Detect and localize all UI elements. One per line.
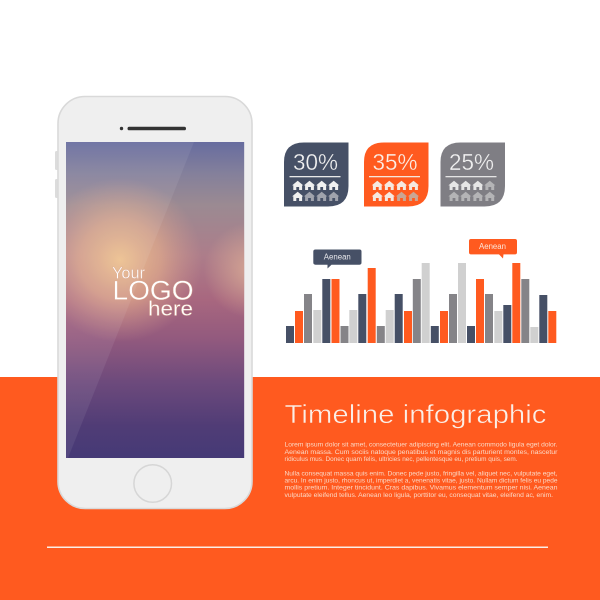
house icons xyxy=(448,181,495,201)
callout: orange Aenean: Aenean xyxy=(479,242,506,251)
house icons xyxy=(372,181,419,201)
paragraph 1 xyxy=(284,442,558,463)
paragraph 2 xyxy=(284,470,558,499)
badge: 25% xyxy=(440,142,505,206)
body text xyxy=(284,442,558,499)
paragraph 1: Aenean massa. Cum sociis natoque penatibus et magnis dis parturient montes, nascetur xyxy=(284,449,558,456)
title: Timeline infographic xyxy=(284,399,546,429)
logo placeholder: here xyxy=(148,298,193,320)
screen xyxy=(66,142,244,458)
badge: 35%: 35% xyxy=(372,149,418,175)
paragraph 1: Lorem ipsum dolor sit amet, consectetuer adipiscing elit. Aenean commodo ligula eget dolor. xyxy=(284,442,558,448)
logo placeholder xyxy=(112,264,194,320)
bar chart xyxy=(286,263,556,343)
callout: navy Aenean: Aenean xyxy=(324,253,351,262)
home button xyxy=(134,465,172,502)
logo placeholder: Your xyxy=(112,264,145,282)
paragraph 1: ridiculus mus. Donec quam felis, ultricies nec, pellentesque eu, pretium quis, sem. xyxy=(284,456,518,463)
speaker and camera xyxy=(120,127,186,130)
logo placeholder: LOGO xyxy=(112,276,194,306)
callout: orange Aenean xyxy=(469,239,517,258)
house icons xyxy=(292,181,339,201)
phone body xyxy=(58,96,252,508)
smartphone xyxy=(55,96,252,508)
badge: 30%: 30% xyxy=(293,149,338,175)
paragraph 2: arcu. In enim justo, rhoncus ut, imperdiet a, venenatis vitae, justo. Nullam dictum felis eu pede xyxy=(284,478,558,484)
side buttons xyxy=(55,151,58,198)
paragraph 2: mollis pretium. Integer tincidunt. Cras dapibus. Vivamus elementum semper nisi. Aenean xyxy=(284,485,558,492)
orange footer band xyxy=(0,377,600,600)
badge: 25%: 25% xyxy=(449,149,494,175)
paragraph 2: Nulla consequat massa quis enim. Donec pede justo, fringilla vel, aliquet nec, vulputate eget, xyxy=(284,470,558,477)
badge: 35% xyxy=(364,142,428,206)
paragraph 2: vulputate eleifend tellus. Aenean leo ligula, porttitor eu, consequat vitae, eleifend ac, enim. xyxy=(284,492,553,499)
badge: 30% xyxy=(284,142,348,206)
callout: navy Aenean xyxy=(313,250,362,268)
